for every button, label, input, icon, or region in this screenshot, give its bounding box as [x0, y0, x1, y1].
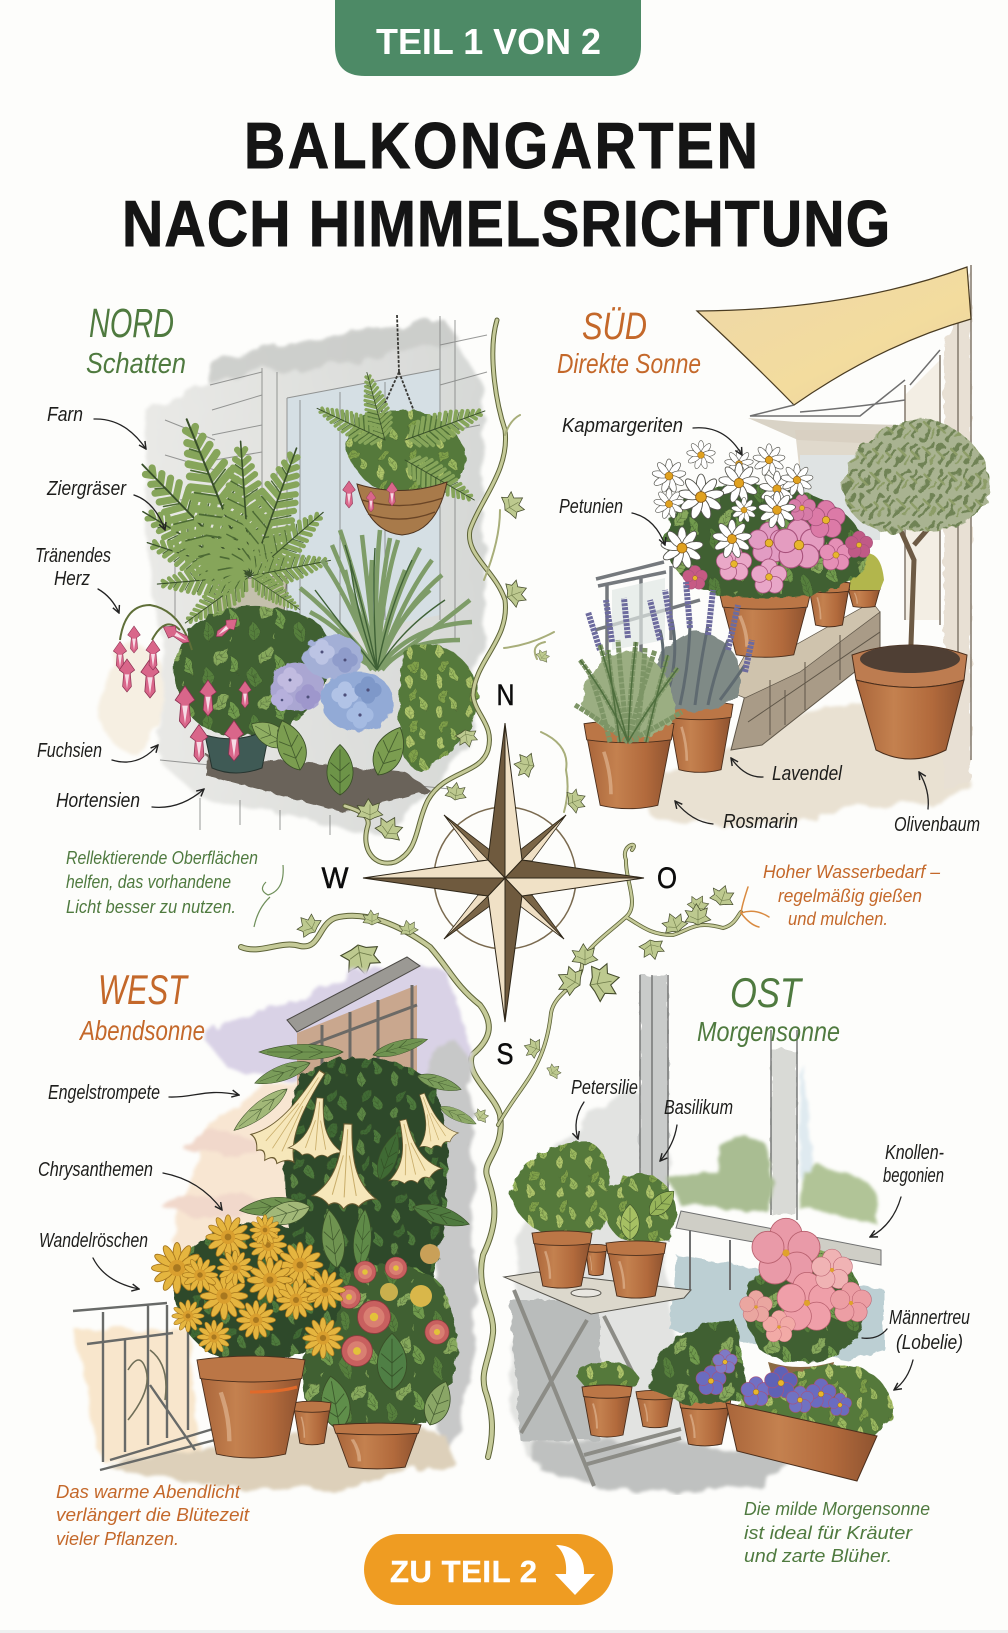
label: Chrysanthemen	[38, 1159, 222, 1210]
label: Fuchsien	[37, 740, 158, 762]
label: Kapmargeriten: Kapmargeriten	[562, 415, 683, 437]
icon: fern	[123, 409, 334, 634]
header tab: Teil 1 von 2	[335, 0, 641, 76]
label: Farn	[47, 404, 146, 449]
heading: Ost: Morgensonne	[697, 1016, 840, 1047]
icon: window sill and railing	[670, 1255, 884, 1360]
note: West: Das warme Abendlicht	[56, 1482, 241, 1502]
title	[122, 110, 890, 260]
label: Basilikum	[660, 1097, 733, 1161]
label: Tränendes Herz	[35, 545, 119, 613]
compass letters: O	[657, 862, 677, 895]
panel: Nord	[35, 300, 490, 927]
title: NACH HIMMELSRICHTUNG	[122, 188, 890, 260]
icon: ornamental grass	[292, 530, 472, 670]
icon: tuberous begonia	[740, 1218, 871, 1398]
compass letters: N	[496, 679, 514, 712]
icon: brick steps	[731, 612, 880, 750]
icon: parsley and basil	[510, 1142, 680, 1298]
compass letters: W	[322, 862, 349, 895]
heading: Nord	[86, 300, 186, 380]
note: Ost: ist ideal für Kräuter	[744, 1523, 913, 1543]
label: Ziergräser	[46, 478, 165, 530]
icon: bleeding heart and fuchsia	[113, 605, 251, 762]
main points	[363, 723, 644, 1022]
icon: chrysanthemums	[152, 1215, 345, 1458]
note: West: vieler Pflanzen.	[56, 1529, 179, 1549]
heading: Ost: OST	[730, 969, 804, 1016]
heading: Süd: SÜD	[582, 306, 647, 348]
label: Petunien	[559, 496, 665, 545]
note: Ost: Die milde Morgensonne	[744, 1499, 930, 1519]
label: Knollenbegonien: begonien	[883, 1165, 944, 1187]
icon: flower pots	[847, 585, 881, 607]
icon: hanging basket	[312, 315, 490, 535]
icon: lobelia window box	[696, 1349, 893, 1481]
label: Ziergräser: Ziergräser	[46, 478, 127, 500]
label: Knollenbegonien	[870, 1142, 944, 1237]
note: Ost	[744, 1499, 930, 1566]
label: Knollenbegonien: Knollen-	[885, 1142, 944, 1164]
note: Nord: helfen, das vorhandene	[66, 872, 231, 892]
heading: Nord: NORD	[89, 300, 174, 346]
compass letters	[322, 679, 677, 1071]
compass rose	[322, 679, 677, 1071]
note: Nord	[66, 848, 283, 927]
label: Petunien: Petunien	[559, 496, 623, 518]
label: Petersilie: Petersilie	[571, 1077, 638, 1099]
label: Olivenbaum	[894, 772, 980, 836]
icon: lavender	[588, 582, 752, 772]
heading: West: WEST	[98, 966, 189, 1013]
label: Wandelröschen	[39, 1230, 148, 1289]
note: Süd: Hoher Wasserbedarf –	[763, 862, 941, 882]
label: Hortensien: Hortensien	[56, 790, 140, 812]
compass letters: S	[496, 1038, 514, 1071]
note: Ost: und zarte Blüher.	[744, 1546, 892, 1566]
label: Fuchsien: Fuchsien	[37, 740, 102, 762]
label: Männertreu (Lobelie): (Lobelie)	[896, 1332, 963, 1354]
icon: teal pot	[205, 728, 270, 773]
label: Rosmarin	[675, 801, 798, 833]
note: Nord: Rellektierende Oberflächen	[66, 848, 258, 868]
label: Kapmargeriten	[562, 415, 742, 455]
icon: olive tree	[842, 418, 991, 759]
button: Zu Teil 2: ZU TEIL 2	[390, 1554, 537, 1589]
heading: West: Abendsonne	[78, 1015, 205, 1046]
heading: Süd	[557, 306, 701, 379]
note: Süd	[763, 862, 941, 929]
vines	[241, 320, 769, 1457]
icon: window and gutter	[287, 957, 420, 1220]
label: Lavendel	[731, 758, 842, 785]
note: Süd: regelmäßig gießen	[778, 886, 922, 906]
icon: daisies and petunias	[652, 441, 873, 598]
label: Tränendes Herz: Herz	[54, 568, 90, 590]
label: Basilikum: Basilikum	[664, 1097, 733, 1119]
icon: folding table	[504, 1272, 691, 1486]
panel: Süd	[557, 265, 991, 929]
heading: West	[78, 966, 205, 1046]
illustration: sunny south balcony	[575, 265, 991, 826]
panel: West	[38, 957, 478, 1549]
icon: trees through window	[670, 1135, 770, 1215]
icon: angel trumpet	[229, 1033, 478, 1303]
illustration: morning east balcony	[504, 975, 893, 1490]
panel: Ost	[504, 969, 970, 1566]
label: Chrysanthemen: Chrysanthemen	[38, 1159, 153, 1181]
icon: shade foliage	[175, 607, 330, 736]
button: Zu Teil 2	[364, 1534, 613, 1605]
label: Tränendes Herz: Tränendes	[35, 545, 111, 567]
icon: lower pots	[575, 1320, 750, 1446]
label: Olivenbaum: Olivenbaum	[894, 814, 980, 836]
note: West	[56, 1482, 250, 1549]
diagonal points	[444, 815, 566, 939]
label: Männertreu (Lobelie)	[862, 1307, 970, 1390]
icon: shade sail	[697, 267, 971, 405]
label: Wandelröschen: Wandelröschen	[39, 1230, 148, 1252]
label: Engelstrompete: Engelstrompete	[48, 1082, 160, 1104]
icon: railing	[595, 562, 700, 690]
label: Hortensien	[56, 789, 204, 812]
header tab: Teil 1 von 2: TEIL 1 VON 2	[376, 21, 601, 62]
heading: Süd: Direkte Sonne	[557, 348, 701, 379]
icon: lantana	[293, 1244, 457, 1469]
icon: rosemary	[575, 640, 682, 809]
heading: Ost	[697, 969, 840, 1047]
icon: hydrangea	[246, 635, 413, 795]
illustration: shaded north balcony	[99, 315, 490, 837]
title: BALKONGARTEN	[244, 110, 758, 182]
note: West: verlängert die Blütezeit	[56, 1505, 250, 1525]
icon: railing	[73, 1303, 215, 1470]
label: Petersilie	[571, 1077, 638, 1139]
label: Lavendel: Lavendel	[772, 763, 842, 785]
heading: Nord: Schatten	[86, 348, 186, 380]
label: Rosmarin: Rosmarin	[723, 811, 798, 833]
label: Männertreu (Lobelie): Männertreu	[889, 1307, 970, 1329]
note: Nord: Licht besser zu nutzen.	[66, 897, 236, 917]
icon: arrow	[555, 1545, 595, 1595]
note: Süd: und mulchen.	[788, 909, 888, 929]
illustration: evening west balcony	[73, 957, 478, 1490]
label: Farn: Farn	[47, 404, 83, 426]
